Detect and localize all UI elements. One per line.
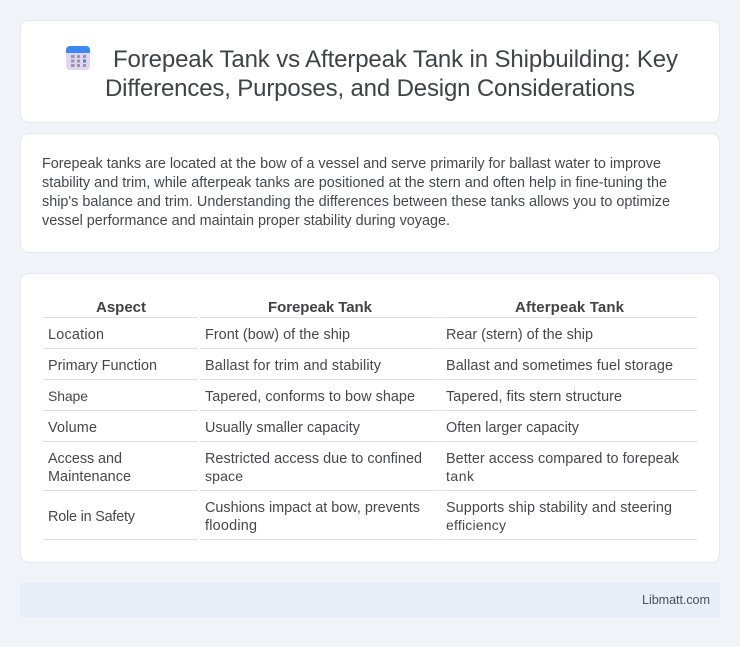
row: access and maintenance: Maintenance — [48, 469, 131, 485]
row: shape: Tapered, conforms to bow shape — [205, 389, 415, 405]
text block: intro: Forepeak tanks are located at the bow of a vessel and serve primarily for ballast water to improve — [42, 156, 661, 172]
text block: intro: vessel performance and maintain proper stability during voyage. — [42, 213, 450, 229]
row: access and maintenance: Restricted access due to confined — [205, 451, 422, 467]
icon: calendar — [66, 46, 90, 70]
table header — [96, 299, 625, 316]
table header: Afterpeak Tank — [515, 299, 625, 316]
row: location: Location — [48, 327, 104, 343]
row: shape: Shape — [48, 388, 88, 404]
row: shape: Tapered, fits stern structure — [446, 389, 622, 405]
text block: intro — [42, 156, 670, 229]
row: volume: Usually smaller capacity — [205, 420, 361, 436]
row: role in safety — [48, 500, 672, 534]
footer: Libmatt.com — [642, 593, 710, 607]
row: access and maintenance: tank — [446, 468, 475, 484]
row: location: Front (bow) of the ship — [205, 327, 350, 343]
row: location — [48, 327, 593, 343]
title: Differences, Purposes, and Design Considerations — [105, 75, 635, 102]
row: role in safety: efficiency — [446, 517, 506, 533]
row: role in safety: Role in Safety — [48, 509, 136, 525]
row: role in safety: Supports ship stability and steering — [446, 500, 672, 516]
row: role in safety: Cushions impact at bow, prevents — [205, 500, 420, 516]
title — [105, 46, 678, 102]
row: access and maintenance: Access and — [48, 451, 122, 467]
row: primary function: Primary Function — [48, 358, 157, 374]
row: primary function: Ballast for trim and stability — [205, 358, 382, 374]
row: access and maintenance — [48, 451, 680, 485]
row: location: Rear (stern) of the ship — [446, 327, 593, 343]
row: volume: Often larger capacity — [446, 420, 580, 436]
row: volume: Volume — [48, 420, 97, 436]
row: access and maintenance: Better access compared to forepeak — [446, 451, 680, 467]
text block: intro: stability and trim, while afterpeak tanks are positioned at the stern and often help in fine-tuning the — [42, 175, 667, 191]
text block: intro: ship's balance and trim. Understanding the differences between these tanks allows you to optimize — [42, 194, 670, 210]
row: access and maintenance: space — [205, 468, 243, 484]
panel: comparison table — [20, 274, 720, 562]
row: shape — [48, 388, 622, 405]
panel: intro text — [20, 134, 720, 252]
table header: Forepeak Tank — [268, 299, 373, 316]
table header: Aspect — [96, 299, 146, 316]
title: Forepeak Tank vs Afterpeak Tank in Shipbuilding: Key — [113, 46, 678, 73]
row: role in safety: flooding — [205, 518, 257, 534]
row: primary function — [48, 358, 673, 374]
row: primary function: Ballast and sometimes fuel storage — [446, 358, 673, 374]
panel: title card — [20, 20, 720, 122]
row: volume — [48, 420, 580, 436]
footer — [20, 583, 720, 617]
